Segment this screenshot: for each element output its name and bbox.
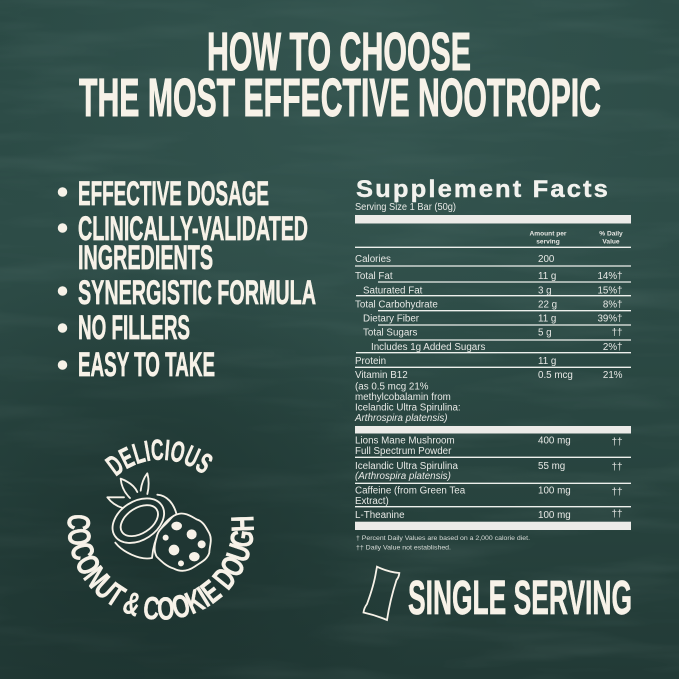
amounts: 100 mg: [538, 510, 571, 521]
amounts: 200: [538, 254, 555, 265]
nutrient names: Icelandic Ultra Spirulina:: [355, 403, 461, 414]
flavor badge: [67, 439, 254, 620]
percent daily values: ††: [612, 462, 622, 473]
panel: supplement facts: [354, 176, 631, 552]
percent daily values: 21%: [603, 370, 623, 381]
column headers: % Daily: [599, 231, 623, 238]
footnotes: † Percent Daily Values are based on a 2,000 calorie diet.: [356, 535, 530, 542]
percent daily values: ††: [612, 509, 622, 520]
column headers: serving: [536, 238, 560, 245]
nutrient names: Arthrospira platensis): [354, 413, 448, 424]
footnotes: [356, 535, 530, 552]
nutrient names: (as 0.5 mcg 21%: [355, 381, 429, 392]
column headers: [530, 231, 623, 245]
amounts: 100 mg: [538, 485, 571, 496]
amounts: 5 g: [538, 328, 552, 339]
percent daily values: 8%†: [603, 300, 622, 311]
percent daily values: [597, 271, 623, 520]
bullet list: nootropic criteria: NO FILLERS: [78, 309, 190, 347]
nutrient names: Saturated Fat: [363, 285, 423, 296]
amounts: 22 g: [538, 300, 557, 311]
percent daily values: 2%†: [603, 342, 622, 353]
title: [79, 22, 601, 128]
nutrient names: Calories: [355, 254, 391, 265]
percent daily values: 14%†: [597, 271, 622, 282]
title: HOW TO CHOOSE: [207, 22, 471, 82]
bullet list: nootropic criteria: CLINICALLY-VALIDATED: [78, 210, 308, 248]
nutrient names: Vitamin B12: [355, 370, 408, 381]
bullet list: nootropic criteria: EFFECTIVE DOSAGE: [78, 175, 269, 213]
percent daily values: ††: [612, 487, 622, 498]
column headers: Amount per: [530, 231, 567, 238]
percent daily values: ††: [612, 328, 622, 339]
table rules: [355, 215, 631, 530]
amounts: 55 mg: [538, 461, 565, 472]
nutrient names: [354, 254, 485, 521]
amounts: 0.5 mcg: [538, 370, 573, 381]
nutrient names: Includes 1g Added Sugars: [371, 342, 485, 353]
serving size: Serving Size 1 Bar (50g): [355, 202, 456, 213]
heading: supplement facts: Supplement Facts: [356, 176, 610, 203]
column headers: Value: [602, 238, 620, 245]
amounts: 11 g: [538, 356, 556, 367]
percent daily values: ††: [612, 437, 622, 448]
bullet list: nootropic criteria: SYNERGISTIC FORMULA: [78, 274, 316, 312]
percent daily values: 15%†: [597, 285, 622, 296]
amounts: [538, 254, 573, 521]
icon: coconut and cookie: [104, 473, 211, 571]
footnotes: †† Daily Value not established.: [356, 544, 451, 552]
nutrient names: Total Sugars: [363, 328, 418, 339]
nutrient names: Full Spectrum Powder: [355, 446, 452, 457]
amounts: 3 g: [538, 285, 552, 296]
nutrient names: Protein: [355, 356, 386, 367]
nutrient names: Extract): [355, 496, 389, 507]
bullet list: nootropic criteria: EASY TO TAKE: [78, 346, 215, 384]
nutrient names: Dietary Fiber: [363, 314, 420, 325]
nutrient names: Total Carbohydrate: [355, 300, 438, 311]
nutrient names: (Arthrospira platensis): [355, 471, 451, 482]
nutrient names: methylcobalamin from: [355, 392, 451, 403]
amounts: 400 mg: [538, 435, 571, 446]
bullet list: nootropic criteria: INGREDIENTS: [78, 239, 213, 277]
badge text: delicious: DELICIOUS: [104, 439, 212, 476]
percent daily values: 39%†: [597, 314, 622, 325]
icon: single serving packet: [364, 567, 399, 620]
amounts: 11 g: [538, 314, 556, 325]
nutrient names: Total Fat: [355, 271, 393, 282]
bullet list: nootropic criteria: [58, 175, 316, 384]
amounts: 11 g: [538, 271, 556, 282]
nutrient names: Icelandic Ultra Spirulina: [355, 461, 458, 472]
badge text: coconut and cookie dough: COCONUT & COOKIE DOUGH: [67, 515, 254, 620]
nutrient names: Lions Mane Mushroom: [355, 435, 455, 446]
nutrient names: Caffeine (from Green Tea: [355, 485, 466, 496]
nutrient names: L-Theanine: [355, 510, 405, 521]
